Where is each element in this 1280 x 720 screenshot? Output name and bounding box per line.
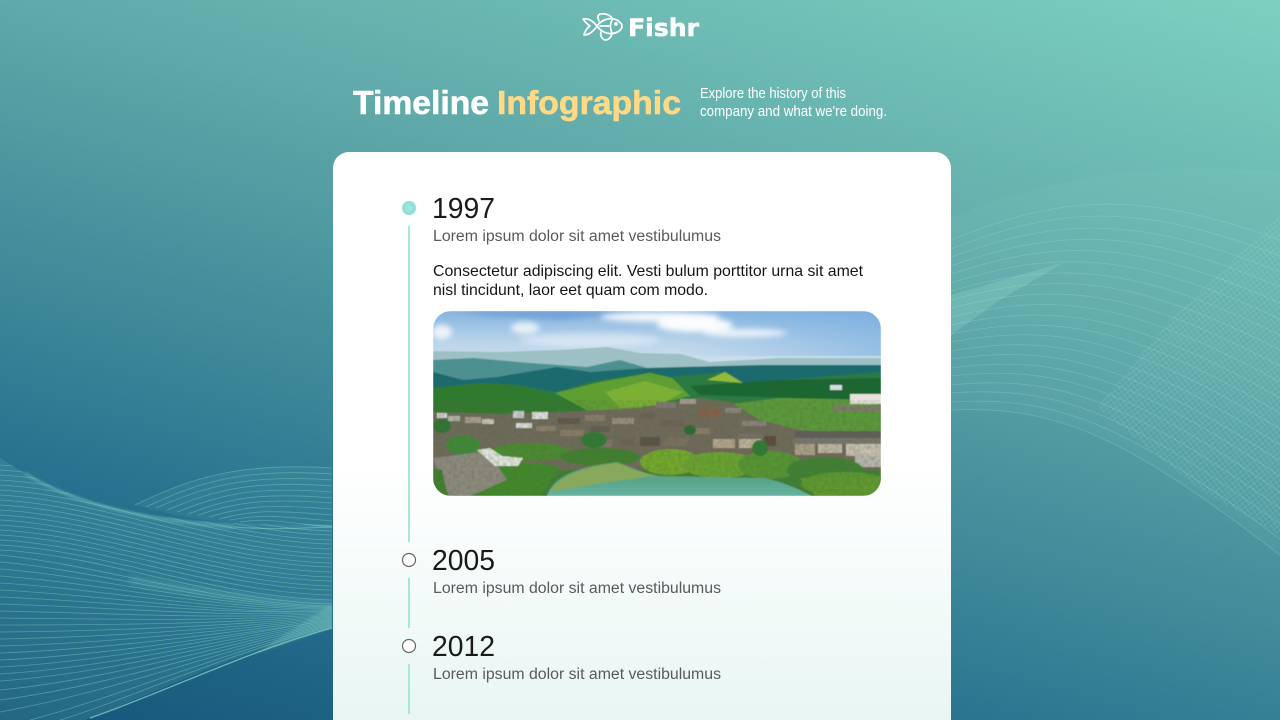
marker: 1997 dot <box>402 201 416 215</box>
subtitle 2012: Lorem ipsum dolor sit amet vestibulumus <box>433 666 721 683</box>
brand name: Fishr <box>628 14 699 42</box>
title accent: Infographic <box>497 84 681 121</box>
connector line 2005 <box>408 578 410 628</box>
year 1997: 1997 <box>432 193 495 225</box>
description 1997 <box>433 263 864 299</box>
logo <box>583 14 699 42</box>
subtitle 1997: Lorem ipsum dolor sit amet vestibulumus <box>433 228 721 245</box>
intro text: company and what we're doing. <box>700 104 887 120</box>
photo: hillside village and lake <box>432 311 889 496</box>
description 1997: Consectetur adipiscing elit. Vesti bulum porttitor urna sit amet <box>433 263 864 280</box>
timeline entry: 1997 <box>402 193 889 542</box>
icon: fish <box>583 14 622 40</box>
intro text <box>700 86 887 120</box>
panel: timeline card <box>333 152 951 720</box>
marker: 2005 ring <box>402 554 416 566</box>
year 2012: 2012 <box>432 631 495 663</box>
connector line 2012 <box>408 664 410 714</box>
timeline entry: 2012 <box>402 631 721 714</box>
timeline entry: 2005 <box>402 545 721 628</box>
description 1997: nisl tincidunt, laor eet quam com modo. <box>433 282 708 299</box>
intro text: Explore the history of this <box>700 86 846 102</box>
year 2005: 2005 <box>432 545 495 577</box>
title: Timeline <box>353 84 489 121</box>
connector line 1997 <box>408 226 410 542</box>
right wave decoration <box>951 169 1280 555</box>
marker: 2012 ring <box>402 640 416 652</box>
subtitle 2005: Lorem ipsum dolor sit amet vestibulumus <box>433 580 721 597</box>
left wave decoration <box>0 458 332 720</box>
